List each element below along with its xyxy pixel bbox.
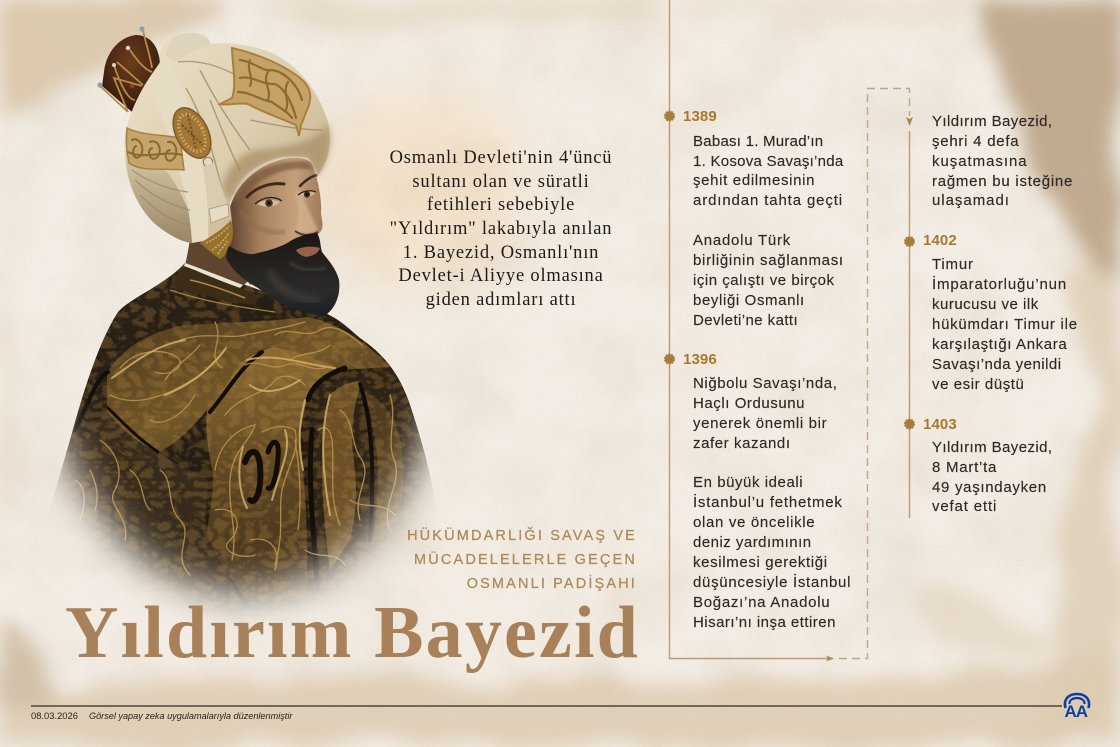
intro paragraph: sultanı olan ve süratli <box>412 172 590 192</box>
intro paragraph: "Yıldırım" lakabıyla anılan <box>390 219 612 239</box>
main title: Yıldırım Bayezid <box>65 592 640 674</box>
event text 1396: Niğbolu Savaşı’nda, <box>693 375 837 392</box>
event text 1402: Timur <box>932 256 974 273</box>
event text 1396: Haçlı Ordusunu <box>693 395 805 412</box>
intro paragraph: Osmanlı Devleti'nin 4'üncü <box>390 148 612 168</box>
continued text 1396: Yıldırım Bayezid, <box>932 113 1053 130</box>
event text 1403: Yıldırım Bayezid, <box>932 439 1053 456</box>
event text 1396: Boğazı’na Anadolu <box>693 594 830 611</box>
gold embroidery on robe <box>75 322 396 575</box>
event text 1403: 8 Mart’ta <box>932 459 997 476</box>
robe <box>53 263 434 622</box>
event text 1389: birliğinin sağlanması <box>693 252 844 269</box>
continued text 1396: şehri 4 defa <box>932 133 1019 150</box>
event text 1396: İstanbul’u fethetmek <box>693 494 843 511</box>
subtitle: OSMANLI PADİŞAHI <box>467 576 637 592</box>
neck and collar <box>170 238 275 312</box>
timeline markers <box>665 111 914 429</box>
jewel brooch <box>165 102 219 167</box>
gold embroidery top <box>220 48 310 136</box>
event text 1396: düşüncesiyle İstanbul <box>693 574 851 591</box>
footer date: 08.03.2026 <box>31 710 78 721</box>
year 1396: 1396 <box>683 351 717 368</box>
face <box>228 158 323 285</box>
turban <box>124 33 330 259</box>
portrait of Sultan Bayezid <box>53 26 434 622</box>
event text 1402: ve esir düştü <box>932 376 1024 393</box>
event text 1396: zafer kazandı <box>693 435 791 452</box>
event text 1403: 49 yaşındayken <box>932 479 1047 496</box>
event text 1396 <box>693 375 851 631</box>
timeline right column <box>923 113 1078 515</box>
subtitle <box>407 526 637 592</box>
deep robe folds <box>75 352 372 590</box>
timeline left column <box>683 108 851 631</box>
intro paragraph: Devlet-i Aliyye olmasına <box>398 266 604 286</box>
continued text 1396: ulaşamadı <box>932 192 1010 209</box>
event text 1396: olan ve öncelikle <box>693 514 815 531</box>
tassel and gold flap <box>200 162 233 259</box>
event text 1396: kesilmesi gerektiği <box>693 554 828 571</box>
event text 1389: 1. Kosova Savaşı’nda <box>693 153 844 170</box>
beard <box>226 233 339 315</box>
event text 1396: yenerek önemli bir <box>693 415 827 432</box>
event text 1389: ardından tahta geçti <box>693 192 843 209</box>
icon: AA logo: AA <box>1064 702 1088 721</box>
subtitle: HÜKÜMDARLIĞI SAVAŞ VE <box>407 528 637 544</box>
event text 1402: Savaşı’nda yenildi <box>932 356 1062 373</box>
year 1403: 1403 <box>923 416 957 433</box>
event text 1396: Hisarı’nı inşa ettiren <box>693 614 836 631</box>
eyes and brows <box>247 175 318 235</box>
turban crown <box>97 26 160 112</box>
event text 1396: En büyük ideali <box>693 474 803 491</box>
event text 1389: Anadolu Türk <box>693 232 791 249</box>
continued text 1396: rağmen bu isteğine <box>932 173 1073 190</box>
intro paragraph: 1. Bayezid, Osmanlı'nın <box>403 243 599 263</box>
event text 1389: için çalıştı ve birçok <box>693 272 834 289</box>
intro paragraph: giden adımları attı <box>426 290 576 310</box>
gold band left <box>126 128 184 170</box>
event text 1402: İmparatorluğu’nun <box>932 276 1067 293</box>
continued text 1396 <box>932 113 1073 209</box>
event text 1402: kurucusu ve ilk <box>932 296 1039 313</box>
year 1402: 1402 <box>923 232 957 249</box>
event text 1402: karşılaştığı Ankara <box>932 336 1067 353</box>
year 1389: 1389 <box>683 108 717 125</box>
continued text 1396: kuşatmasına <box>932 153 1028 170</box>
event text 1389: beyliği Osmanlı <box>693 292 805 309</box>
event text 1389: Babası 1. Murad’ın <box>693 133 823 150</box>
subtitle: MÜCADELELERLE GEÇEN <box>414 552 637 568</box>
event text 1389: Devleti’ne kattı <box>693 312 798 329</box>
intro paragraph <box>390 148 612 310</box>
event text 1403 <box>932 439 1053 515</box>
event text 1402 <box>932 256 1078 393</box>
event text 1396: deniz yardımının <box>693 534 812 551</box>
event text 1389: şehit edilmesinin <box>693 172 815 189</box>
footer note: Görsel yapay zeka uygulamalarıyla düzenlenmiştir <box>89 711 292 721</box>
event text 1403: vefat etti <box>932 498 997 515</box>
event text 1402: hükümdarı Timur ile <box>932 316 1078 333</box>
event text 1389 <box>693 133 844 329</box>
footer rule <box>31 705 1062 706</box>
intro paragraph: fetihleri sebebiyle <box>427 195 575 215</box>
